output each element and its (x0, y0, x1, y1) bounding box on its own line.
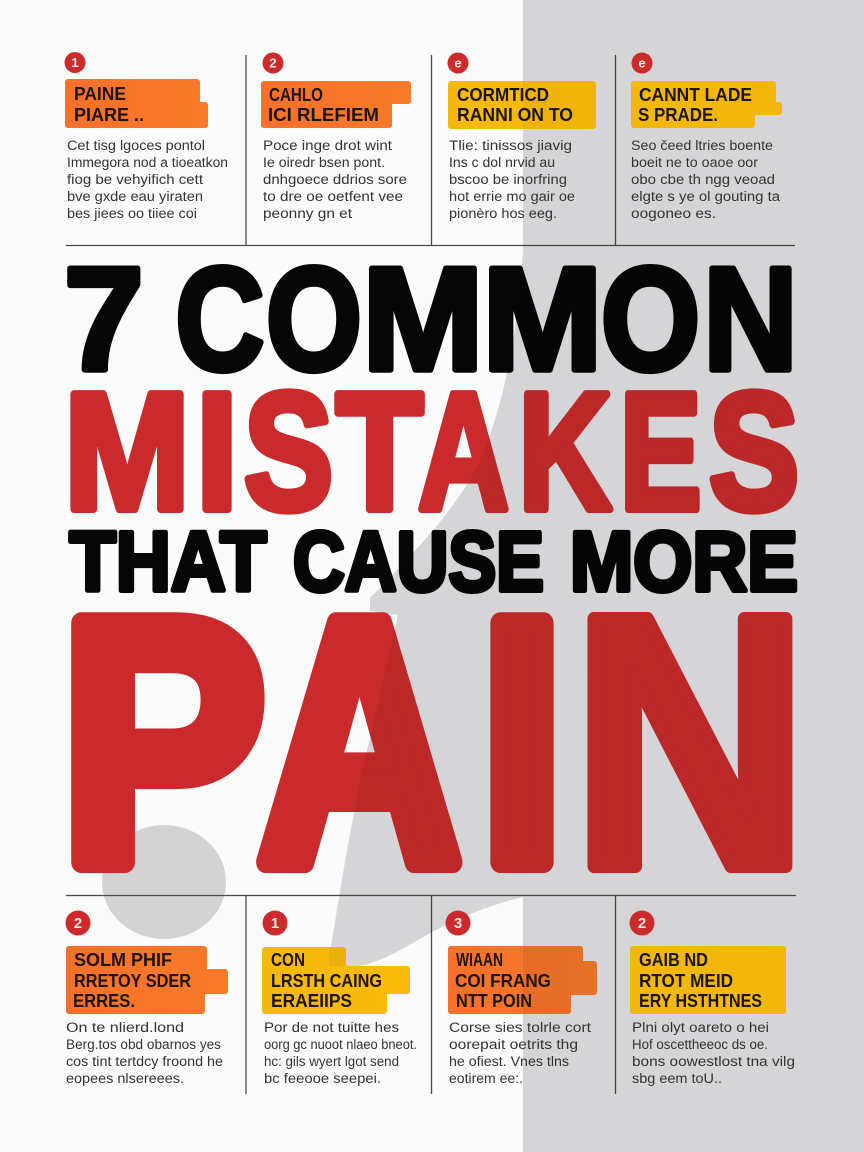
heading box 5 (66, 946, 228, 1014)
title line: 7 COMMON: N (703, 238, 798, 402)
body text 2: Ie oiredr bsen pont. (263, 155, 385, 170)
badge 2 (262, 52, 284, 74)
badge 4 (632, 52, 652, 74)
body text 5: cos tint tertdcy froond he (66, 1054, 223, 1069)
title line: 7 COMMON: 7 (64, 238, 144, 402)
body text 3: Ins c dol nrvid au (449, 155, 555, 170)
heading box 8 (630, 946, 786, 1014)
heading box 7: NTT POIN (456, 990, 532, 1011)
body text 8: sbg eem toU.. (632, 1071, 722, 1086)
rules and dividers (66, 55, 796, 1094)
body text 1: Immegora nod a tioeatkon (67, 155, 228, 170)
title line: THAT CAUSE MORE: CAUSE (293, 514, 544, 608)
body text 4: boeit ne to oaoe oor (631, 155, 759, 170)
body text 5: On te nlierd.lond (66, 1020, 184, 1035)
title line: THAT CAUSE MORE: THAT (70, 514, 266, 608)
body text 7: Corse sies tolrle cort (449, 1020, 591, 1035)
title line: MISTAKES: T (336, 359, 423, 545)
body text 2 (263, 138, 407, 221)
icon: exclamation dot (102, 825, 226, 939)
body text 3: bscoo be inorfring (449, 172, 567, 187)
panel: bottom card 2 (262, 910, 417, 1086)
body text 7: he ofiest. Vnes tlns (449, 1054, 569, 1069)
heading box 2: ICI RLEFIEM (268, 104, 379, 125)
title (60, 238, 808, 943)
badge 4: e (638, 56, 646, 70)
body text 3 (449, 138, 575, 221)
body text 6 (264, 1020, 417, 1086)
title line: PAIN: P (60, 548, 265, 936)
panel: top card 3 (448, 52, 596, 221)
heading box 7 (448, 946, 597, 1014)
body text 2: dnhgoece ddrios sore (263, 172, 407, 187)
badge 1: 1 (71, 55, 79, 70)
title line: MISTAKES: S (709, 359, 799, 545)
panel: top card 1 (64, 52, 228, 221)
heading box 7: WIAAN (456, 949, 503, 970)
badge 7 (446, 910, 470, 936)
body text 6: hc: gils wyert lgot send (264, 1054, 399, 1069)
heading box 7: COI FRANG (455, 970, 551, 991)
body text 5: eopees nlsereees. (66, 1071, 184, 1086)
heading box 6: LRSTH CAING (271, 970, 382, 991)
badge 3: e (454, 56, 462, 70)
body text 5: Berg.tos obd obarnos yes (66, 1037, 221, 1052)
badge 8: 2 (638, 915, 646, 932)
title line: MISTAKES: A (418, 359, 509, 545)
title line: MISTAKES: I (196, 359, 238, 545)
panel: bottom card 4 (630, 910, 795, 1086)
heading box 8: RTOT MEID (639, 970, 733, 991)
body text 1: bes jiees oo tiiee coi (67, 206, 197, 221)
heading box 5: SOLM PHIF (74, 949, 172, 970)
body text 4 (631, 138, 781, 221)
heading box 3 (448, 81, 596, 129)
badge 6: 1 (271, 915, 279, 932)
body text 8: bons oowestlost tna vilg (632, 1054, 795, 1069)
title line: 7 COMMON: O (601, 238, 700, 402)
title line: MISTAKES: S (244, 359, 333, 545)
heading box 4 (631, 81, 782, 128)
title line: PAIN: I (480, 548, 564, 936)
body text 4: elgte s ye ol gouting ta (631, 189, 781, 204)
body text 5 (66, 1020, 223, 1086)
body text 3: pionèro hos eeg. (449, 206, 557, 221)
body text 1: bve gxde eau yiraten (67, 189, 203, 204)
title line: MISTAKES: E (620, 359, 702, 545)
panel: top card 4 (631, 52, 782, 221)
body text 4: obo cbe th ngg veoad (631, 172, 775, 187)
shadow overlay: exclamation stroke (328, 0, 864, 1152)
heading box 1 (65, 79, 208, 128)
title line: 7 COMMON: C (175, 238, 264, 402)
badge 2: 2 (269, 56, 277, 70)
body text 7 (449, 1020, 591, 1086)
body text 1 (67, 138, 228, 221)
heading box 6 (262, 947, 410, 1014)
heading box 1: PAINE (74, 83, 126, 104)
body text 3: Tlie: tinissos jiavig (449, 138, 572, 153)
body text 1: fiog be vehyifich cett (67, 172, 203, 187)
heading box 2 (261, 81, 411, 128)
badge 3 (448, 52, 468, 74)
title line: PAIN: A (258, 548, 461, 936)
heading box 2: CAHLO (269, 84, 323, 105)
body text 2: Poce inge drot wint (263, 138, 392, 153)
panel: bottom card 1 (66, 910, 228, 1086)
heading box 8: ERY HSTHTNES (639, 990, 762, 1011)
title line: 7 COMMON: O (266, 238, 362, 402)
body text 2: peonny gn et (263, 206, 352, 221)
body text 4: oogoneo es. (631, 206, 716, 221)
body text 6: bc feeooe seepei. (264, 1071, 381, 1086)
title line: 7 COMMON: M (482, 238, 603, 402)
title line: THAT CAUSE MORE: MORE (570, 514, 798, 608)
body text 6: oorg gc nuoot nlaeo bneot. (264, 1037, 417, 1052)
heading box 6: CON (271, 949, 305, 970)
body text 1: Cet tisg lgoces pontol (67, 138, 205, 153)
badge 5 (66, 910, 90, 936)
title line: 7 COMMON: M (362, 238, 484, 402)
heading box 1: PIARE .. (74, 104, 144, 125)
heading box 6: ERAEIIPS (271, 990, 352, 1011)
heading box 5: ERRES. (73, 990, 135, 1011)
title line: PAIN: N (572, 542, 808, 943)
body text 7: oorepait oetrits thg (449, 1037, 578, 1052)
heading box 5: RRETOY SDER (74, 970, 191, 991)
body text 8: Plni olyt oareto o hei (632, 1020, 769, 1035)
panel: bottom card 3 (446, 910, 597, 1086)
heading box 4: CANNT LADE (639, 84, 752, 105)
heading box 8: GAIB ND (639, 949, 708, 970)
title line: MISTAKES: M (64, 359, 190, 545)
badge 8 (630, 910, 654, 936)
body text 7: eotirem ee:. (449, 1071, 523, 1086)
body text 6: Por de not tuitte hes (264, 1020, 399, 1035)
body text 4: Seo čeed ltries boente (631, 138, 773, 153)
badge 1 (64, 52, 86, 73)
panel: top card 2 (261, 52, 411, 221)
body text 8: Hof oscettheeoc ds oe. (632, 1037, 768, 1052)
heading box 3: RANNI ON TO (457, 104, 573, 125)
heading box 4: S PRADE. (638, 104, 718, 125)
badge 7: 3 (454, 915, 462, 932)
badge 6 (262, 910, 288, 936)
heading box 3: CORMTICD (457, 84, 549, 105)
body text 2: to dre oe oetfent vee (263, 189, 403, 204)
badge 5: 2 (74, 915, 82, 932)
body text 8 (632, 1020, 795, 1086)
title line: MISTAKES: K (518, 359, 612, 545)
body text 3: hot errie mo gair oe (449, 189, 575, 204)
